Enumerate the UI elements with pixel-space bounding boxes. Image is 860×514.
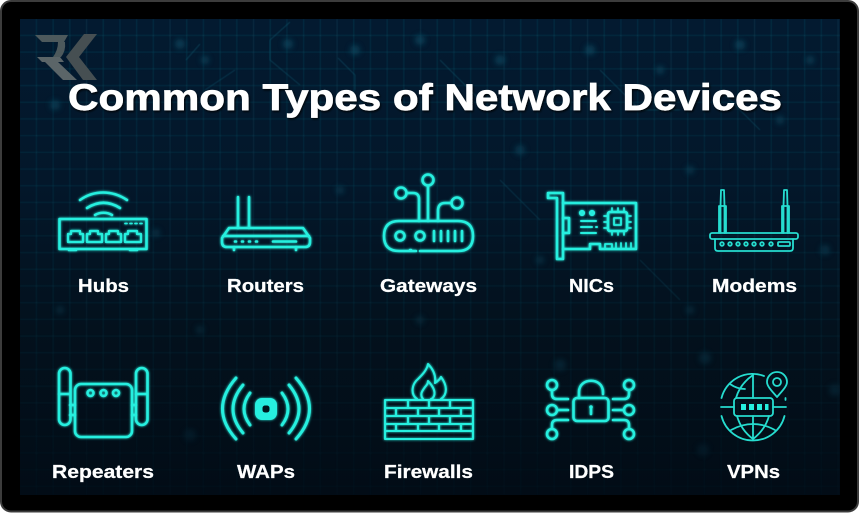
- label: Routers: Routers: [227, 275, 304, 296]
- icon: NICs: [548, 193, 636, 259]
- logo: RK mark: [35, 34, 97, 80]
- label: Gateways: Gateways: [380, 275, 477, 296]
- icon: gateways: [384, 174, 473, 251]
- label: WAPs: WAPs: [237, 461, 295, 482]
- icon: VPNs: [721, 372, 787, 440]
- icon: IDPS: [547, 380, 634, 439]
- title: Common Types of Network Devices: [68, 77, 782, 118]
- icon: WAPs: [222, 378, 310, 439]
- icon: modems: [710, 190, 798, 251]
- label: Firewalls: Firewalls: [384, 461, 473, 482]
- icon: hubs: [60, 192, 146, 250]
- icon: routers: [222, 197, 310, 250]
- icon: repeaters: [59, 368, 148, 437]
- label: IDPS: IDPS: [569, 461, 614, 482]
- label: Hubs: Hubs: [78, 275, 129, 296]
- icon: firewalls: [385, 364, 473, 439]
- label: Repeaters: Repeaters: [52, 461, 154, 482]
- label: NICs: NICs: [569, 275, 614, 296]
- label: VPNs: VPNs: [727, 461, 780, 482]
- label: Modems: Modems: [712, 275, 797, 296]
